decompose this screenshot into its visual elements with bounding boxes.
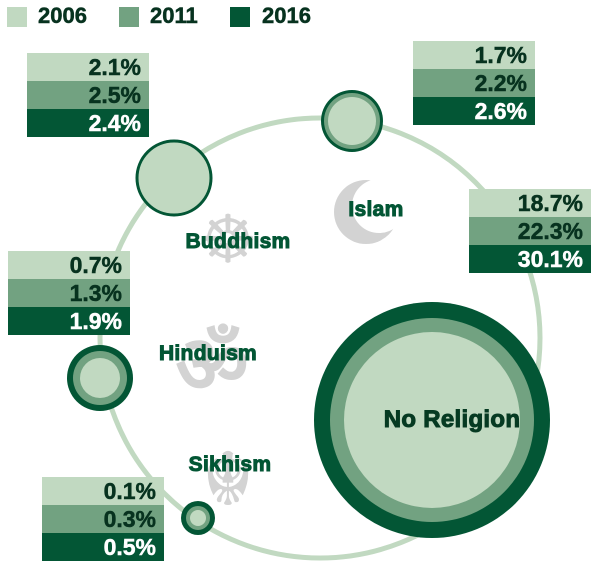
label: no religion: No Religion bbox=[384, 406, 520, 433]
icon: om: ॐ bbox=[176, 318, 248, 411]
circle: sikhism bbox=[181, 501, 215, 535]
icon: crescent bbox=[334, 179, 406, 244]
legend: 2016 bbox=[262, 3, 311, 28]
legend bbox=[7, 3, 311, 28]
table: hinduism: 0.7% bbox=[70, 252, 122, 278]
table: no religion: 18.7% bbox=[518, 190, 583, 216]
circle: islam bbox=[321, 90, 383, 152]
label: hinduism: Hinduism bbox=[159, 342, 257, 365]
table: islam: 1.7% bbox=[475, 42, 527, 68]
legend: 2011 bbox=[150, 3, 198, 28]
table: sikhism: 0.3% bbox=[104, 506, 156, 532]
table: no religion: 30.1% bbox=[518, 246, 583, 272]
table: islam: 2.6% bbox=[475, 98, 527, 124]
table: hinduism: 1.9% bbox=[70, 308, 122, 334]
circle: buddhism bbox=[137, 141, 211, 215]
table: sikhism: 0.5% bbox=[104, 534, 156, 560]
table: buddhism bbox=[27, 53, 149, 137]
table: no religion: 22.3% bbox=[518, 218, 583, 244]
table: hinduism: 1.3% bbox=[70, 280, 122, 306]
icon: dharma wheel: ☸ bbox=[198, 201, 258, 278]
table: buddhism: 2.5% bbox=[89, 82, 141, 108]
table: buddhism: 2.1% bbox=[89, 54, 141, 80]
legend: 2006 bbox=[38, 3, 87, 28]
circle: hinduism bbox=[67, 345, 133, 411]
table: islam: 2.2% bbox=[475, 70, 527, 96]
label: sikhism: Sikhism bbox=[189, 453, 271, 476]
circle: no religion bbox=[314, 302, 550, 538]
table: sikhism: 0.1% bbox=[104, 478, 156, 504]
icon: khanda: ☬ bbox=[202, 437, 254, 523]
table: hinduism bbox=[8, 251, 130, 335]
label: buddhism: Buddhism bbox=[185, 230, 291, 253]
label: islam: Islam bbox=[348, 198, 404, 221]
table: no religion bbox=[469, 189, 591, 273]
table: buddhism: 2.4% bbox=[89, 110, 141, 136]
table: islam bbox=[413, 41, 535, 125]
table: sikhism bbox=[42, 477, 164, 561]
